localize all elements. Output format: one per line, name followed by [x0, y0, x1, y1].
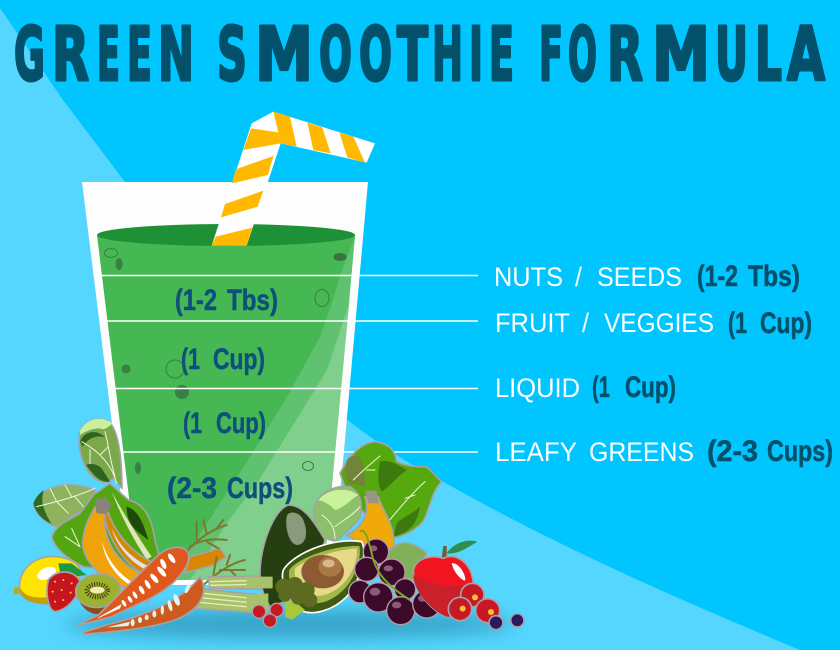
romaine left: [52, 483, 159, 573]
cranberries small: [252, 603, 283, 627]
glass amounts: Cup): [213, 343, 265, 376]
title: E: [127, 12, 152, 98]
glass amounts: (1: [181, 343, 200, 376]
title: O: [359, 12, 392, 98]
title: U: [715, 12, 748, 98]
label: nuts seeds: SEEDS: [597, 262, 682, 292]
glass amounts: [167, 284, 293, 505]
label: fruit veggies: Cup): [760, 307, 812, 340]
title: E: [97, 12, 120, 98]
title: L: [755, 12, 782, 98]
liquid surface: [97, 224, 355, 246]
label: liquid: LIQUID: [495, 373, 580, 403]
kiwi: [74, 572, 122, 614]
collard leaf top: [79, 419, 122, 488]
label: liquid: [495, 371, 676, 404]
food shadow: [65, 609, 515, 639]
label: fruit veggies: [495, 307, 812, 340]
avocado half: [282, 541, 364, 613]
label: fruit veggies: (1: [728, 307, 747, 340]
smoothie liquid: [97, 235, 355, 580]
glass amounts: (2-3: [167, 472, 217, 505]
carrot one: [77, 547, 189, 626]
cherries: [349, 531, 441, 625]
label: nuts seeds: (1-2: [697, 260, 738, 293]
celery ends: [247, 577, 273, 610]
label: leafy greens: [495, 435, 833, 468]
celery: [192, 576, 273, 613]
title: R: [52, 12, 89, 98]
title: O: [319, 12, 352, 98]
label: liquid: Cup): [625, 371, 676, 404]
level lines: [94, 276, 478, 452]
title: N: [158, 12, 194, 98]
apple: [413, 541, 477, 617]
food right group: [247, 442, 524, 630]
title: O: [568, 12, 597, 98]
title: I: [469, 12, 483, 98]
glass amounts: Cup): [216, 407, 266, 440]
food left group: [14, 419, 273, 634]
label: nuts seeds: NUTS: [494, 262, 563, 292]
small leaf: [385, 543, 427, 580]
banana bunch: [83, 497, 170, 603]
bubbles: [104, 248, 346, 474]
title: F: [539, 12, 563, 98]
glass amounts: Cups): [227, 472, 293, 505]
lemon: [14, 557, 81, 604]
label: nuts seeds: [494, 260, 800, 293]
glass: [82, 182, 368, 585]
label: fruit veggies: VEGGIES: [604, 308, 714, 338]
liquid highlight: [170, 237, 355, 580]
label: fruit veggies: /: [582, 308, 589, 338]
title: S: [217, 12, 247, 98]
title: R: [607, 12, 643, 98]
cabbage: [313, 486, 361, 542]
title: M: [255, 12, 313, 98]
glass amounts: (1: [183, 407, 202, 440]
whole avocado: [260, 505, 325, 607]
label: nuts seeds: Tbs): [748, 260, 800, 293]
broccoli: [275, 577, 317, 620]
collard leaf left: [33, 485, 95, 526]
label: leafy greens: GREENS: [589, 437, 694, 467]
banana right: [347, 491, 394, 548]
carrot two: [83, 577, 204, 634]
title: M: [652, 12, 710, 98]
cranberries large: [448, 583, 500, 623]
banana tail: [185, 548, 226, 573]
label: leafy greens: LEAFY: [495, 437, 577, 467]
liquid highlight inner: [190, 295, 350, 580]
title: E: [489, 12, 514, 98]
glass amounts: Tbs): [227, 284, 278, 317]
carrot greens: [185, 520, 245, 585]
label: nuts seeds: /: [575, 262, 582, 292]
label: leafy greens: (2-3: [707, 435, 758, 468]
strawberry: [47, 563, 87, 612]
glass amounts: (1-2: [175, 284, 217, 317]
blueberries: [489, 614, 524, 630]
title: H: [432, 12, 463, 98]
title: T: [397, 12, 428, 98]
title: G: [14, 12, 45, 98]
cranberry centers: [460, 594, 494, 615]
straw: [212, 112, 375, 246]
smoothie glass: [82, 182, 368, 585]
romaine right: [340, 442, 442, 538]
label: fruit veggies: FRUIT: [495, 308, 570, 338]
label: liquid: (1: [592, 371, 610, 404]
